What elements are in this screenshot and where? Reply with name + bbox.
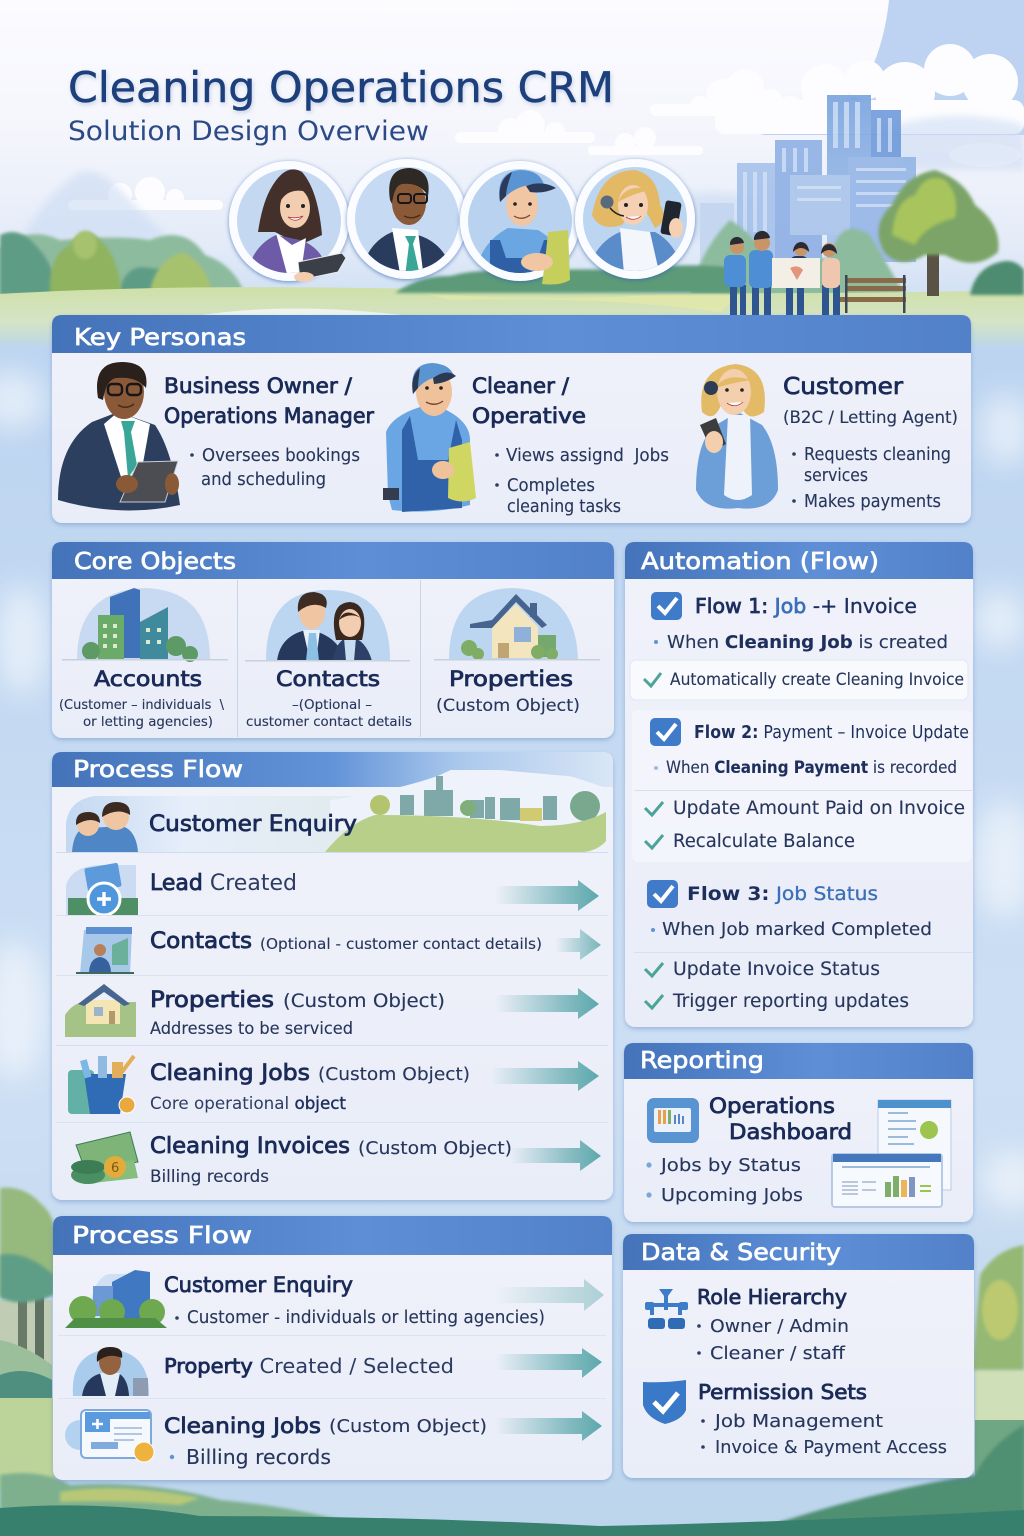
heading: automation: Automation (Flow) bbox=[641, 549, 879, 575]
text: operations dashboard: Dashboard bbox=[729, 1120, 852, 1144]
text: cleaner: Cleaner / bbox=[472, 374, 570, 398]
text: permission sets: Permission Sets bbox=[698, 1380, 867, 1404]
illustration: city skyline bbox=[700, 95, 916, 268]
persona: customer figure bbox=[696, 364, 778, 509]
step: customer enquiry bbox=[65, 1270, 604, 1328]
text: business owner: and scheduling bbox=[201, 469, 326, 490]
step: contacts bbox=[76, 927, 601, 974]
step: properties bbox=[65, 984, 599, 1039]
arrow bbox=[490, 1061, 599, 1091]
text: cleaner: Views assignd Jobs bbox=[506, 445, 669, 466]
step: customer enquiry banner: Customer Enquiry bbox=[149, 812, 357, 837]
text: business owner: Operations Manager bbox=[164, 404, 374, 428]
text: role hierarchy: Role Hierarchy bbox=[697, 1285, 847, 1309]
text: role hierarchy: Cleaner / staff bbox=[710, 1343, 846, 1364]
icon: accounts buildings bbox=[62, 588, 228, 662]
step: customer enquiry: Customer Enquiry bbox=[164, 1273, 353, 1297]
text: operations dashboard bbox=[709, 1094, 852, 1144]
step: property created: Property Created / Selected bbox=[164, 1354, 454, 1378]
arrow bbox=[555, 929, 601, 960]
flow 2 bbox=[632, 710, 972, 862]
step: cleaning invoices: (Custom Object) bbox=[358, 1138, 512, 1159]
step: properties: (Custom Object) bbox=[283, 990, 445, 1012]
avatars row bbox=[229, 159, 695, 285]
step: lead created: Lead Created bbox=[150, 871, 297, 896]
heading: data and security: Data & Security bbox=[641, 1240, 841, 1266]
step: cleaning invoices: Billing records bbox=[150, 1167, 269, 1187]
persona: business owner figure bbox=[58, 362, 180, 510]
arrow bbox=[495, 1411, 602, 1441]
step: contacts: (Optional - customer contact details) bbox=[260, 935, 542, 953]
flow 2: Flow 2: Payment – Invoice Update bbox=[694, 723, 969, 743]
avatar: customer bbox=[575, 159, 695, 285]
text: cleaner: Operative bbox=[472, 404, 586, 428]
text: accounts bbox=[59, 667, 224, 730]
text: role hierarchy: Owner / Admin bbox=[710, 1316, 849, 1337]
flow 1: When Cleaning Job is created bbox=[667, 632, 948, 653]
text: role hierarchy bbox=[697, 1285, 849, 1364]
text: properties bbox=[436, 667, 580, 715]
icon: properties house bbox=[434, 588, 600, 660]
flow 3: Trigger reporting updates bbox=[672, 990, 909, 1012]
step: properties: Addresses to be serviced bbox=[150, 1019, 353, 1039]
text: properties: Properties bbox=[449, 667, 573, 691]
avatar: cleaner bbox=[460, 161, 580, 285]
text: permission sets bbox=[698, 1380, 947, 1458]
panel: process flow 2 bbox=[53, 1216, 612, 1480]
step: cleaning jobs bbox=[65, 1410, 602, 1469]
step: cleaning jobs: (Custom Object) bbox=[329, 1417, 487, 1437]
arrow bbox=[495, 880, 599, 911]
panel: data and security bbox=[623, 1234, 974, 1478]
text: accounts: or letting agencies) bbox=[83, 714, 213, 730]
step: cleaning invoices: 6 bbox=[111, 1161, 119, 1176]
step: cleaning invoices: Cleaning Invoices bbox=[150, 1134, 350, 1159]
text: cleaner: Completes bbox=[507, 475, 595, 496]
step: cleaning invoices bbox=[71, 1132, 601, 1187]
text: contacts: customer contact details bbox=[246, 714, 412, 730]
text: properties: (Custom Object) bbox=[436, 696, 580, 715]
step: cleaning jobs: (Custom Object) bbox=[318, 1064, 470, 1085]
step: customer enquiry: Customer - individuals or letting agencies) bbox=[187, 1308, 545, 1328]
panel: key personas bbox=[52, 315, 971, 523]
icon: role hierarchy bbox=[645, 1289, 688, 1329]
text: customer: Requests cleaning bbox=[804, 444, 951, 465]
text: business owner bbox=[164, 374, 374, 490]
illustration: lower park bbox=[0, 1188, 1024, 1536]
flow 3 bbox=[634, 880, 972, 1012]
persona: cleaner figure bbox=[383, 363, 476, 512]
illustration: park and trees bbox=[0, 170, 1024, 345]
flow 1: Flow 1: Job -+ Invoice bbox=[695, 594, 917, 618]
text: customer: services bbox=[804, 465, 868, 486]
flow 2: Update Amount Paid on Invoice bbox=[673, 797, 965, 819]
flow 2: Recalculate Balance bbox=[673, 830, 855, 852]
step: cleaning jobs: Core operational object bbox=[150, 1094, 346, 1114]
list: reporting items: Jobs by Status bbox=[660, 1155, 801, 1176]
step: cleaning jobs: Billing records bbox=[186, 1445, 331, 1469]
list: reporting items: Upcoming Jobs bbox=[661, 1185, 803, 1206]
text: accounts: (Customer – individuals \ bbox=[59, 697, 224, 713]
step: cleaning jobs: Cleaning Jobs bbox=[164, 1414, 321, 1438]
step: properties: Properties bbox=[150, 988, 274, 1013]
arrow bbox=[510, 1140, 601, 1171]
step: cleaning jobs bbox=[68, 1056, 599, 1114]
step: cleaning jobs: Cleaning Jobs bbox=[150, 1061, 310, 1086]
flow 1: Automatically create Cleaning Invoice bbox=[670, 670, 964, 689]
text: contacts: Contacts bbox=[276, 667, 380, 691]
arrow bbox=[495, 1279, 604, 1311]
text: contacts: –(Optional – bbox=[292, 697, 372, 713]
text: customer: (B2C / Letting Agent) bbox=[783, 408, 958, 428]
panel: core objects bbox=[52, 542, 614, 738]
title: Cleaning Operations CRM bbox=[68, 63, 614, 112]
panel: process flow 1 bbox=[52, 752, 613, 1200]
text: operations dashboard: Operations bbox=[709, 1094, 835, 1118]
arrow bbox=[495, 1348, 602, 1378]
list: reporting items bbox=[646, 1155, 803, 1206]
step: customer enquiry banner bbox=[66, 770, 606, 852]
text: permission sets: Invoice & Payment Access bbox=[715, 1437, 947, 1458]
flow 2: When Cleaning Payment is recorded bbox=[666, 758, 957, 778]
text: permission sets: Job Management bbox=[714, 1411, 883, 1432]
flow 3: When Job marked Completed bbox=[662, 919, 932, 940]
step: contacts: Contacts bbox=[150, 929, 252, 954]
icon: dashboard monitor bbox=[647, 1098, 699, 1143]
text: business owner: Oversees bookings bbox=[202, 445, 360, 466]
heading: process flow: Process Flow bbox=[73, 757, 243, 783]
heading: core objects: Core Objects bbox=[74, 549, 236, 575]
flow 3: Update Invoice Status bbox=[673, 958, 880, 980]
text: contacts bbox=[246, 667, 412, 730]
header: key personas bbox=[52, 315, 971, 353]
icon: contacts people bbox=[245, 590, 410, 662]
icon: shield bbox=[643, 1380, 686, 1424]
panel: automation flow bbox=[625, 542, 973, 1027]
icon: report cards bbox=[832, 1100, 951, 1207]
flow 1 bbox=[630, 592, 968, 700]
flow 3: Flow 3: Job Status bbox=[687, 883, 878, 905]
step: lead created bbox=[66, 863, 599, 915]
panel: reporting bbox=[624, 1043, 973, 1222]
text: accounts: Accounts bbox=[94, 667, 202, 691]
illustration: group with map and bench bbox=[724, 231, 906, 315]
heading: reporting: Reporting bbox=[640, 1048, 764, 1074]
text: cleaner: cleaning tasks bbox=[507, 496, 621, 517]
text: customer bbox=[783, 374, 958, 512]
text: cleaner bbox=[472, 374, 669, 517]
step: property created bbox=[73, 1347, 602, 1396]
avatar: manager bbox=[347, 159, 467, 285]
subtitle: Solution Design Overview bbox=[68, 116, 429, 147]
arrow bbox=[495, 988, 599, 1019]
avatar: woman with tablet bbox=[229, 161, 349, 285]
text: customer: Customer bbox=[783, 374, 904, 400]
text: business owner: Business Owner / bbox=[164, 374, 353, 398]
heading: process flow 2: Process Flow bbox=[72, 1223, 252, 1249]
header: key personas: Key Personas bbox=[74, 325, 246, 351]
text: customer: Makes payments bbox=[804, 491, 941, 512]
